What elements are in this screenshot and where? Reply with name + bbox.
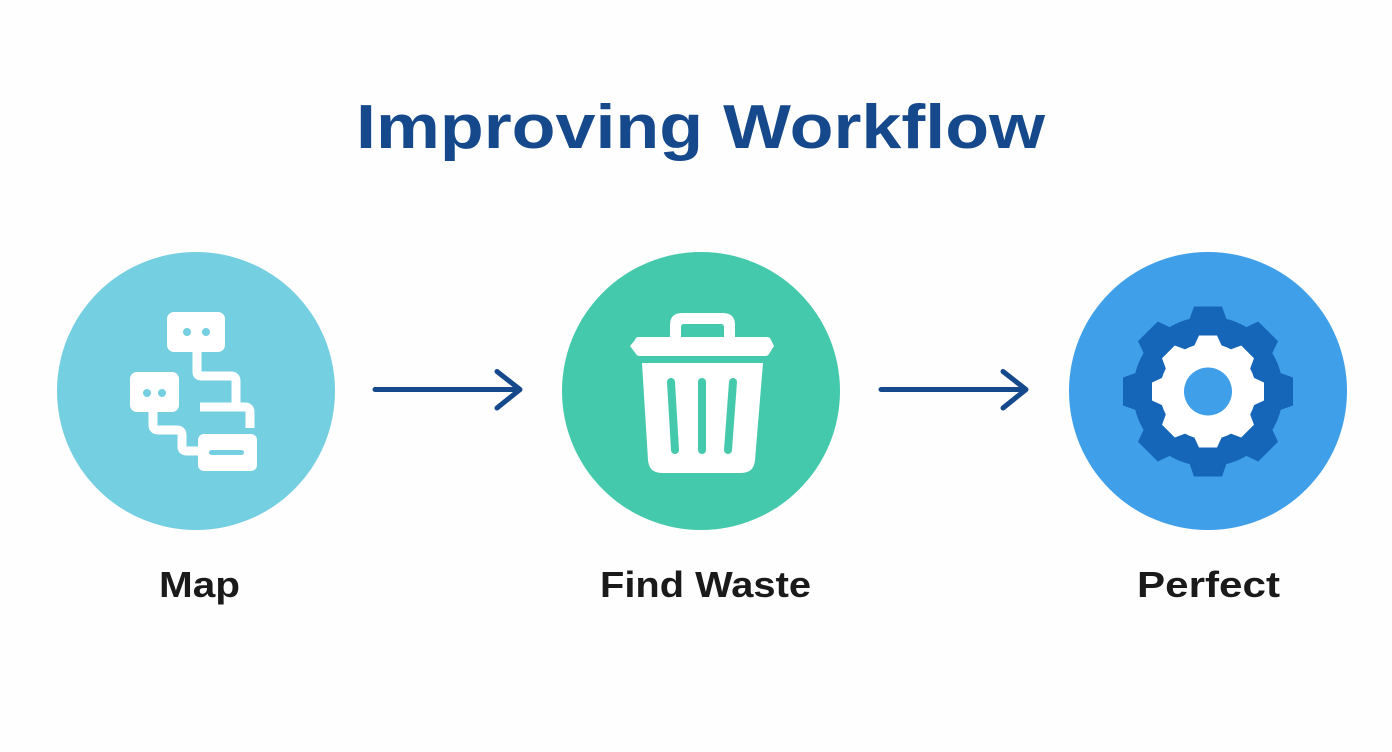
- perfect circle: [1069, 252, 1347, 530]
- arrow: map to find waste: [375, 372, 520, 408]
- icon: trash can: [630, 313, 774, 473]
- title: Improving Workflow: [356, 93, 1046, 162]
- icon: gear: [1123, 306, 1293, 476]
- find waste circle: [562, 252, 840, 530]
- panel: perfect step: [1069, 252, 1347, 605]
- perfect label: Perfect: [1137, 564, 1280, 605]
- panel: find waste step: [562, 252, 840, 605]
- icon: flowchart: [130, 312, 257, 471]
- map label: Map: [159, 564, 240, 605]
- find waste label: Find Waste: [600, 564, 811, 605]
- panel: map step: [57, 252, 335, 605]
- map circle: [57, 252, 335, 530]
- arrow: find waste to perfect: [881, 372, 1026, 408]
